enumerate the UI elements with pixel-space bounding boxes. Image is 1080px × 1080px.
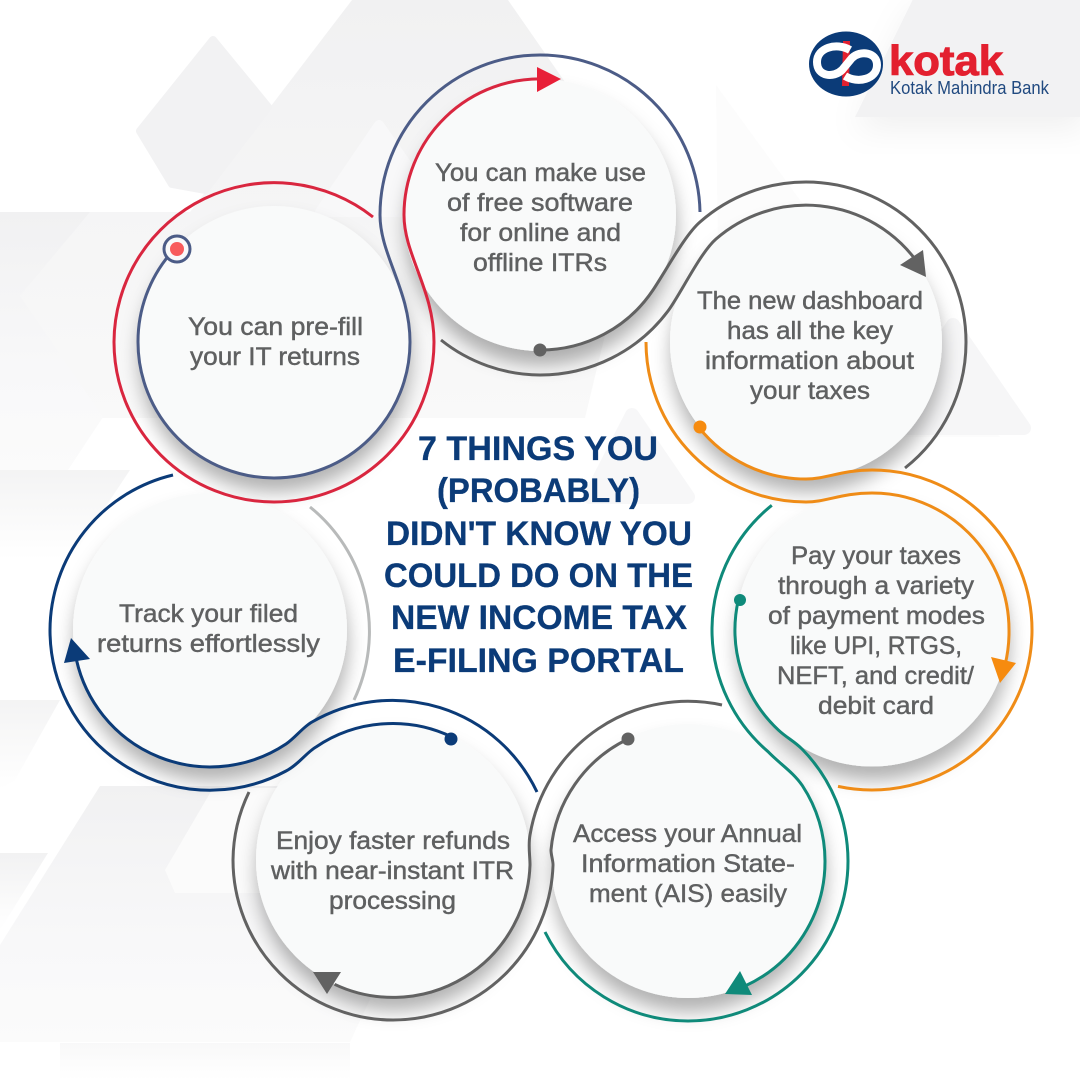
panel: track filed returns xyxy=(73,493,347,767)
panel: faster refunds: processing xyxy=(329,887,456,915)
panel: payment modes: through a variety xyxy=(778,572,975,600)
logo wordmark: kotak xyxy=(889,37,1004,84)
panel: faster refunds: Enjoy faster refunds xyxy=(276,827,510,855)
connector: grey line from top dot to dashboard xyxy=(534,182,966,468)
panel: new dashboard xyxy=(670,206,942,478)
panel: faster refunds xyxy=(256,723,530,997)
panel: new dashboard: your taxes xyxy=(750,377,870,405)
logo mark xyxy=(809,32,883,96)
panel: faster refunds: with near-instant ITR xyxy=(270,857,514,885)
connector: orange line from dot xyxy=(694,420,1032,790)
title: NEW INCOME TAX xyxy=(391,599,687,637)
panel: payment modes: debit card xyxy=(818,692,934,720)
title: (PROBABLY) xyxy=(437,472,640,510)
panel: free software: offline ITRs xyxy=(473,249,607,277)
panel: pre-fill returns: You can pre-fill xyxy=(188,313,363,341)
logo subtitle: Kotak Mahindra Bank xyxy=(890,78,1050,98)
title: 7 THINGS YOU xyxy=(418,430,658,468)
connector: grey line with refunds arrow xyxy=(313,701,722,997)
connector: teal line from dot xyxy=(545,594,848,1021)
connector: blue line with start marker xyxy=(138,55,700,478)
panel: free software: of free software xyxy=(447,189,633,217)
connector: navy line with arrow xyxy=(64,638,537,792)
panel: payment modes xyxy=(736,494,1008,766)
connector: teal line with arrow xyxy=(712,505,825,995)
panel: track filed returns: returns effortlessly xyxy=(97,630,321,658)
connector: grey line from dot xyxy=(233,732,634,1020)
panel: track filed returns: Track your filed xyxy=(119,600,298,628)
panel: free software: for online and xyxy=(460,219,621,247)
panel: new dashboard: The new dashboard xyxy=(697,287,923,315)
connector: red line with arrow xyxy=(114,67,561,502)
connector: navy line from dot xyxy=(50,475,458,790)
panel: payment modes: NEFT, and credit/ xyxy=(777,662,974,690)
connector: light grey arc xyxy=(310,507,369,700)
panel: new dashboard: information about xyxy=(705,347,914,375)
title: DIDN'T KNOW YOU xyxy=(386,515,692,553)
logo: Kotak Mahindra Bank xyxy=(809,32,1050,98)
panel: payment modes: of payment modes xyxy=(768,602,985,630)
connector: grey line with dashboard arrow xyxy=(441,205,926,375)
title: COULD DO ON THE xyxy=(384,557,693,595)
title xyxy=(384,430,693,680)
panel: pre-fill returns: your IT returns xyxy=(190,343,360,371)
connector: orange line with arrow xyxy=(646,342,1016,683)
panel: free software xyxy=(404,79,676,351)
panel: pre-fill returns xyxy=(138,206,410,478)
panel: payment modes: like UPI, RTGS, xyxy=(790,632,962,660)
panel: annual information statement: ment (AIS) easily xyxy=(589,880,788,908)
title: E-FILING PORTAL xyxy=(393,642,684,680)
panel: payment modes: Pay your taxes xyxy=(791,542,961,570)
panel: annual information statement xyxy=(551,724,825,998)
panel: annual information statement: Access your Annual xyxy=(573,820,802,848)
panel: annual information statement: Information State- xyxy=(581,850,795,878)
panel: free software: You can make use xyxy=(435,159,646,187)
panel: new dashboard: has all the key xyxy=(727,317,894,345)
